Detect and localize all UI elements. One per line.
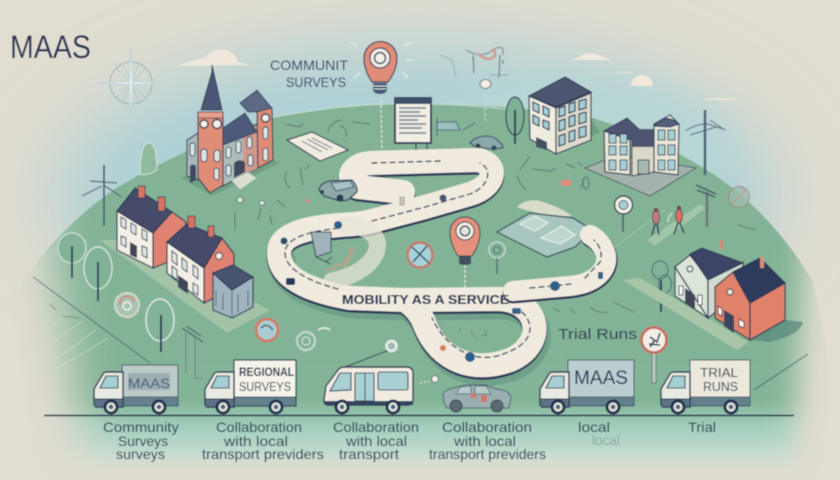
caption: trial: Trial bbox=[688, 419, 716, 435]
red scuff bbox=[327, 248, 355, 270]
utility pole left bbox=[182, 326, 203, 378]
road markers bbox=[280, 194, 603, 362]
car top right bbox=[470, 136, 503, 150]
caption: collaboration 1: with local bbox=[223, 433, 288, 449]
clouds and sun right bbox=[570, 53, 736, 100]
truck: regional surveys: SURVEYS bbox=[239, 380, 291, 394]
caption: collaboration 2: Collaboration bbox=[333, 419, 419, 435]
title: MAAS bbox=[10, 29, 91, 65]
survey text: SURVEYS bbox=[286, 74, 346, 90]
signpost centre right bbox=[489, 242, 505, 274]
road inner fade bbox=[332, 225, 377, 281]
road shadow bbox=[282, 260, 537, 372]
road surface bbox=[279, 160, 534, 365]
hill top highlight bbox=[270, 104, 510, 118]
caption: collaboration 3 bbox=[429, 419, 546, 462]
apartment building bbox=[529, 77, 600, 154]
church bbox=[181, 65, 280, 196]
trial runs label: Trial Runs bbox=[558, 326, 637, 343]
round signs lower left bbox=[115, 293, 330, 350]
truck: regional surveys bbox=[205, 360, 296, 414]
no sign faded bbox=[728, 186, 756, 230]
truck: MAAS grey bbox=[94, 365, 178, 414]
truck: regional surveys: REGIONAL bbox=[239, 367, 294, 379]
road sign in loop bbox=[311, 232, 332, 264]
left house two bbox=[167, 216, 234, 303]
truck: trial runs: TRIAL bbox=[700, 366, 738, 380]
scattered sketches bbox=[235, 156, 584, 230]
truck: MAAS bbox=[540, 360, 634, 414]
car bottom bbox=[443, 385, 511, 412]
red house bbox=[715, 257, 785, 340]
banner label: MOBILITY AS A SERVICE bbox=[342, 293, 509, 307]
truck: MAAS: MAAS bbox=[574, 368, 628, 389]
caption: local: local bbox=[578, 419, 610, 435]
no-entry round sign centre bbox=[408, 242, 432, 268]
stop sign bbox=[642, 328, 666, 383]
road bbox=[279, 160, 607, 372]
icon: location bulb top bbox=[351, 42, 413, 94]
baseline bbox=[44, 414, 794, 416]
cloud left bbox=[177, 49, 253, 66]
car on road bbox=[319, 180, 357, 202]
icon: compass bbox=[97, 47, 165, 117]
caption: collaboration 3: Collaboration bbox=[442, 419, 532, 435]
red marker bbox=[237, 177, 589, 206]
townhouse with plaza bbox=[585, 115, 696, 196]
caption: collaboration 3: transport previders bbox=[429, 446, 546, 462]
tree right bbox=[652, 261, 672, 312]
icon: location bulb centre bbox=[450, 217, 480, 265]
loop grass sketches bbox=[459, 302, 634, 338]
people bbox=[652, 206, 684, 235]
slanted line right bbox=[754, 354, 808, 390]
signpost bbox=[614, 196, 632, 232]
survey text bbox=[270, 57, 348, 90]
caption: collaboration 2: with local bbox=[345, 433, 407, 449]
billboard bbox=[395, 98, 431, 165]
caption: community surveys: Community bbox=[103, 419, 179, 435]
truck: trial runs bbox=[661, 360, 750, 414]
left trees bbox=[58, 233, 174, 352]
caption: community surveys: Surveys bbox=[118, 433, 168, 449]
faded map sketch bbox=[440, 48, 509, 78]
dashed guide lines bbox=[381, 100, 465, 288]
caption: collaboration 1: Collaboration bbox=[216, 419, 302, 435]
path strip right bbox=[608, 205, 705, 252]
caption: collaboration 2 bbox=[333, 419, 419, 462]
caption: collaboration 1 bbox=[202, 419, 324, 462]
left house one bbox=[117, 186, 186, 268]
tree top bbox=[506, 97, 524, 144]
right road bbox=[513, 237, 607, 293]
caption: collaboration 2: transport bbox=[339, 446, 399, 462]
pin small top bbox=[480, 80, 491, 122]
bush left bbox=[140, 143, 157, 174]
caption: collaboration 1: transport previders bbox=[202, 446, 324, 462]
house shadow bbox=[750, 320, 803, 342]
truck: trial runs: RUNS bbox=[703, 380, 738, 394]
caption: local: local bbox=[592, 432, 620, 448]
small vehicle sketch bbox=[437, 118, 475, 136]
small grey building bbox=[213, 265, 253, 318]
grey house bbox=[675, 240, 743, 318]
bus bbox=[324, 340, 413, 414]
right sidewalk bbox=[623, 278, 748, 350]
pylon bbox=[685, 110, 726, 175]
parking lot lines bbox=[32, 277, 150, 368]
road dashes bbox=[285, 161, 601, 357]
survey text: COMMUNIT bbox=[270, 57, 348, 73]
caption: community surveys bbox=[103, 419, 179, 462]
caption: community surveys: surveys bbox=[116, 446, 165, 462]
left houses sidewalk bbox=[100, 240, 270, 333]
lower road edge bbox=[279, 162, 534, 367]
truck: MAAS grey: MAAS bbox=[128, 375, 170, 391]
green hill bbox=[0, 104, 840, 480]
wind turbine left bbox=[82, 165, 122, 226]
small map plaza bbox=[497, 200, 592, 257]
clipboard bbox=[287, 132, 348, 161]
caption: collaboration 3: with local bbox=[453, 433, 516, 449]
utility pole bbox=[696, 185, 716, 227]
stray marker bbox=[420, 376, 438, 383]
faded headset sketch bbox=[285, 120, 370, 137]
caption: local bbox=[578, 419, 620, 448]
